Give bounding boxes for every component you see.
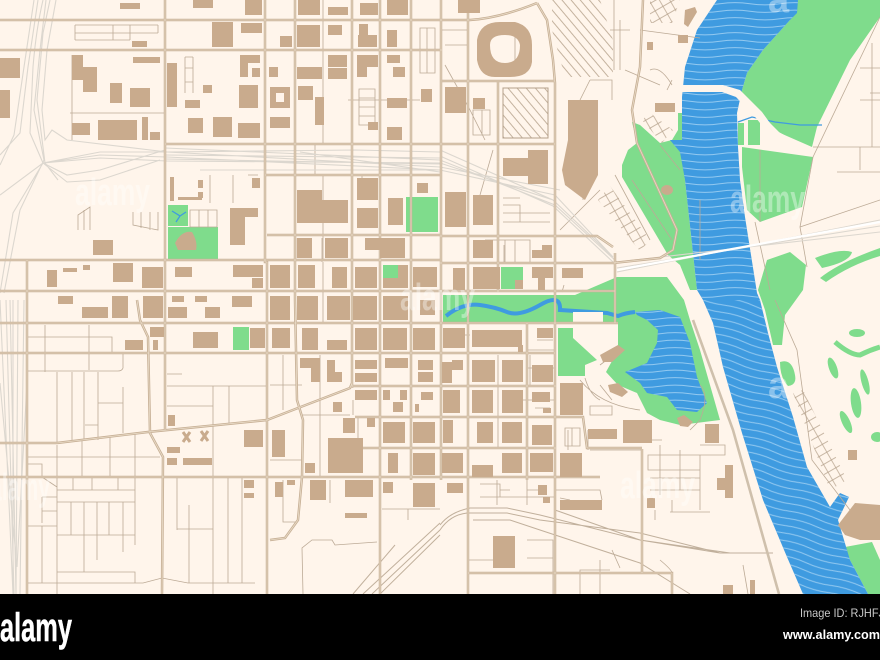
river bbox=[660, 0, 880, 594]
small ponds and stream bbox=[172, 117, 822, 222]
creek bbox=[446, 300, 635, 316]
rail lines bbox=[353, 508, 773, 594]
watermark: alamy bbox=[620, 465, 695, 507]
watermark: alamy bbox=[400, 277, 475, 319]
bridge deck bbox=[617, 222, 880, 270]
major streets bbox=[0, 0, 677, 594]
residential hatching bbox=[503, 0, 847, 490]
lake bbox=[625, 310, 707, 412]
footer url: www.alamy.com bbox=[782, 627, 880, 642]
footer logo: alamy bbox=[0, 606, 72, 650]
watermark: alamy bbox=[730, 179, 805, 221]
irregular buildings bbox=[175, 7, 880, 540]
watermark: a bbox=[768, 365, 790, 407]
parks bbox=[168, 0, 880, 594]
cut-outs in parks bbox=[573, 85, 812, 322]
riverside rail corridor bbox=[693, 320, 779, 594]
footer bar bbox=[0, 594, 880, 660]
watermark bbox=[0, 0, 805, 509]
watermark: alamy bbox=[75, 172, 150, 214]
